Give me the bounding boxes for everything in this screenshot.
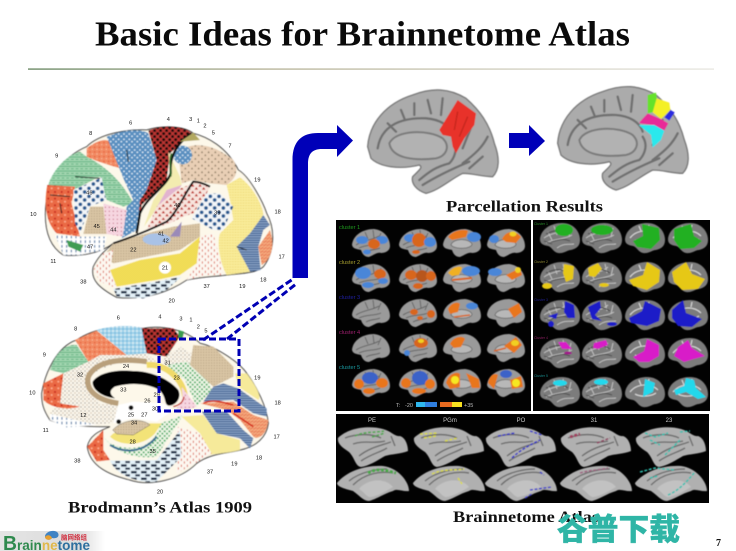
panel: Brodmann medial brain map: 5 [204, 329, 208, 335]
row 1 green [540, 223, 580, 253]
panel: Brodmann lateral brain map: 1 [197, 119, 200, 125]
panel: cluster functional connectivity maps: cluster 3 [339, 295, 360, 301]
panel: Brodmann medial brain map: 32 [77, 372, 83, 378]
panel: seed clusters on whole-brain views [533, 220, 710, 411]
panel: seed clusters on whole-brain views: Cluster 1 [534, 222, 548, 226]
panel: Brodmann medial brain map: 19 [231, 461, 237, 467]
panel: Brodmann medial brain map: 19 [254, 376, 260, 382]
panel: Brodmann lateral brain map: 2 [203, 124, 207, 130]
row 3 [352, 299, 390, 327]
panel: Brodmann medial brain map: 2 [197, 325, 200, 331]
panel: Brodmann medial brain map: 4 [158, 315, 162, 321]
arrow: blue elbow arrow to parcellation results [292, 125, 353, 278]
panel: Brodmann medial brain map: 27 [141, 412, 147, 418]
row 2 yellow [540, 262, 580, 292]
panel: cluster functional connectivity maps: cluster 5 [339, 365, 360, 371]
panel: macaque tractography maps [336, 414, 709, 503]
panel: Brodmann lateral brain map: 20 [169, 299, 175, 305]
arrow: small blue arrow between brains [509, 125, 545, 156]
panel: cluster functional connectivity maps [336, 220, 531, 411]
panel: Brodmann lateral brain map: 4 [167, 117, 170, 123]
panel: Brodmann medial brain map: 12 [80, 413, 86, 419]
panel: Brodmann lateral brain map: 17 [279, 255, 285, 261]
panel: macaque tractography maps: 23 [666, 418, 673, 424]
colour scale legend: T: [396, 403, 401, 409]
panel: Brodmann medial brain map: 31 [165, 360, 171, 366]
panel: Brodmann medial brain map: 23 [174, 375, 180, 381]
panel: seed clusters on whole-brain views: Cluster 2 [534, 260, 548, 264]
logo: Brainnetome: 脑网络组 [61, 532, 88, 542]
panel: Brodmann lateral brain map: 46 [86, 190, 92, 196]
panel: macaque tractography maps: PO [517, 418, 526, 424]
panel: Brodmann lateral brain map: 18 [275, 210, 281, 216]
panel: cluster functional connectivity maps: cluster 1 [339, 225, 360, 231]
row 3 blue [540, 300, 580, 330]
panel: macaque tractography maps: PGm [443, 418, 457, 424]
panel: Brodmann lateral brain map: 7 [228, 144, 232, 150]
panel: Brodmann lateral brain map: 10 [30, 212, 36, 218]
colour scale legend: +35 [464, 403, 473, 409]
panel: Brodmann medial brain map: 17 [274, 435, 280, 441]
row 1 [352, 229, 390, 257]
panel: seed clusters on whole-brain views: Cluster 5 [534, 374, 548, 378]
page number: 7 [716, 538, 721, 549]
panel: Brodmann medial brain map: 6 [117, 316, 120, 322]
panel: Brodmann lateral brain map: 11 [50, 259, 56, 265]
panel: Brodmann lateral brain map: 19 [254, 177, 260, 183]
panel: Brodmann medial brain map: 34 [131, 421, 137, 427]
panel: Brodmann medial brain map: 10 [29, 391, 35, 397]
panel: cluster functional connectivity maps: cluster 2 [339, 260, 360, 266]
panel: Brodmann lateral brain map: 40 [174, 203, 180, 209]
panel: Brodmann lateral brain map: 38 [80, 280, 86, 286]
panel: Brodmann lateral brain map: 5 [212, 130, 215, 136]
watermark: 谷普下载 [557, 505, 680, 549]
panel: Brodmann medial brain map: 33 [120, 387, 126, 393]
panel: Brodmann lateral brain map: 45 [94, 224, 100, 230]
row 2 [352, 264, 390, 292]
panel: Brodmann lateral brain map: 22 [130, 247, 136, 253]
panel: Brodmann medial brain map: 38 [74, 459, 80, 465]
panel: Brodmann medial brain map: 35 [150, 449, 156, 455]
icon: medial brain with red region [368, 90, 498, 193]
panel: Brodmann lateral brain map: 47 [87, 245, 93, 251]
panel: Brodmann medial brain map: 30 [152, 406, 158, 412]
row 4 magenta [540, 338, 580, 368]
panel: Brodmann medial brain map: 11 [43, 428, 49, 434]
panel: Brodmann lateral brain map: 3 [189, 117, 192, 123]
panel: cluster functional connectivity maps: cluster 4 [339, 330, 360, 336]
panel: Brodmann medial brain map: 26 [144, 398, 150, 404]
dashed selection box and connector [159, 279, 296, 411]
row 5 cyan [540, 377, 580, 407]
caption: Brainnetome Atlas: Brainnetome Atlas [453, 509, 599, 526]
panel: Brodmann lateral brain map: 41 [158, 231, 164, 237]
panel: Brodmann lateral brain map: 6 [129, 120, 132, 126]
panel: Brodmann medial brain map: 18 [256, 456, 262, 462]
panel: Brodmann medial brain map: 18 [275, 401, 281, 407]
panel: Brodmann medial brain map: 29 [154, 392, 160, 398]
panel: Brodmann medial brain map: 28 [130, 440, 136, 446]
panel: Brodmann lateral brain map: 39 [214, 211, 220, 217]
row 5 [352, 369, 390, 397]
panel: Brodmann medial brain map: 8 [74, 326, 77, 332]
panel: Brodmann lateral brain map: 9 [55, 154, 58, 160]
caption: Brodmann's Atlas 1909: Brodmann’s Atlas 1909 [68, 500, 252, 516]
caption: Parcellation Results: Parcellation Results [446, 198, 603, 216]
panel: Brodmann medial brain map: 24 [123, 364, 129, 370]
colour scale legend [396, 402, 473, 409]
panel: Brodmann medial brain map: 20 [157, 490, 163, 496]
panel: Brodmann medial brain map [29, 315, 281, 496]
panel: Brodmann lateral brain map: 21 [162, 266, 168, 272]
panel: Brodmann lateral brain map: 8 [89, 131, 92, 137]
panel: macaque tractography maps: 31 [591, 418, 598, 424]
panel: seed clusters on whole-brain views: Cluster 4 [534, 336, 548, 340]
panel: Brodmann medial brain map: 37 [207, 470, 213, 476]
panel: Brodmann lateral brain map: 42 [163, 239, 169, 245]
title: Basic Ideas for Brainnetome Atlas [95, 14, 630, 54]
panel: Brodmann lateral brain map: 19 [239, 284, 245, 290]
panel: Brodmann lateral brain map: 18 [260, 277, 266, 283]
panel: Brodmann lateral brain map: 37 [204, 284, 210, 290]
panel: Brodmann medial brain map: 25 [128, 412, 134, 418]
colour scale legend: -20 [405, 403, 413, 409]
panel: Brodmann medial brain map: 3 [179, 316, 183, 322]
panel: Brodmann lateral brain map [30, 117, 285, 305]
panel: Brodmann medial brain map: 1 [189, 317, 193, 323]
panel: Brodmann lateral brain map: 44 [110, 227, 116, 233]
panel: macaque tractography maps: PE [368, 418, 376, 424]
icon: medial brain with coloured parcels [558, 87, 688, 190]
panel: Brodmann medial brain map: 9 [43, 352, 46, 358]
panel: seed clusters on whole-brain views: Cluster 3 [534, 298, 548, 302]
row 4 [352, 334, 390, 362]
